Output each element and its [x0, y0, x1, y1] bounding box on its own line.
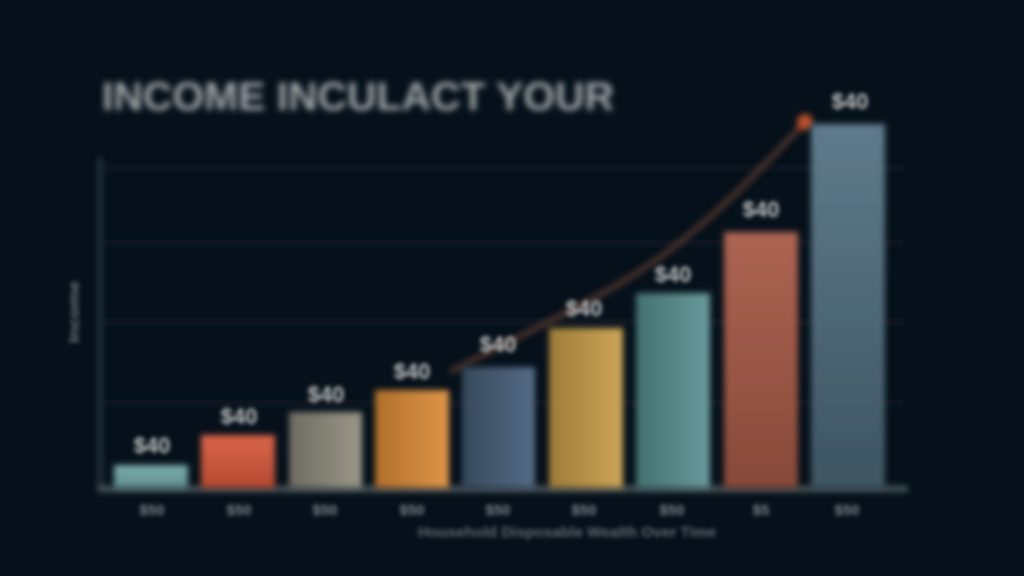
x-axis tick labels: $50 [659, 502, 685, 519]
x-axis tick labels: $50 [312, 502, 338, 519]
trend line [450, 114, 813, 372]
y-axis label: Income [66, 281, 83, 343]
x-axis tick labels: $50 [399, 502, 425, 519]
x-axis tick labels: $50 [571, 502, 597, 519]
x-axis tick labels: $50 [834, 502, 860, 519]
bar value labels: $40 [832, 89, 868, 114]
bar value labels [134, 89, 868, 458]
bar value labels: $40 [655, 262, 691, 287]
x-axis tick labels: $5 [753, 502, 769, 519]
bar value labels: $40 [480, 332, 516, 357]
bar value labels: $40 [743, 197, 779, 222]
x-axis tick labels: $50 [139, 502, 165, 519]
bar chart [66, 89, 908, 541]
x-axis tick labels [139, 502, 860, 519]
x-axis tick labels: $50 [226, 502, 252, 519]
grid lines and axes [98, 158, 908, 490]
bar value labels: $40 [308, 382, 344, 407]
bar value labels: $40 [566, 296, 602, 321]
bar value labels: $40 [134, 433, 170, 458]
bar value labels: $40 [394, 359, 430, 384]
bars [114, 124, 885, 488]
x-axis title: Household Disposable Wealth Over Time [418, 524, 716, 541]
bar value labels: $40 [221, 404, 257, 429]
x-axis tick labels: $50 [485, 502, 511, 519]
title: INCOME INCULACT YOUR [102, 75, 614, 119]
